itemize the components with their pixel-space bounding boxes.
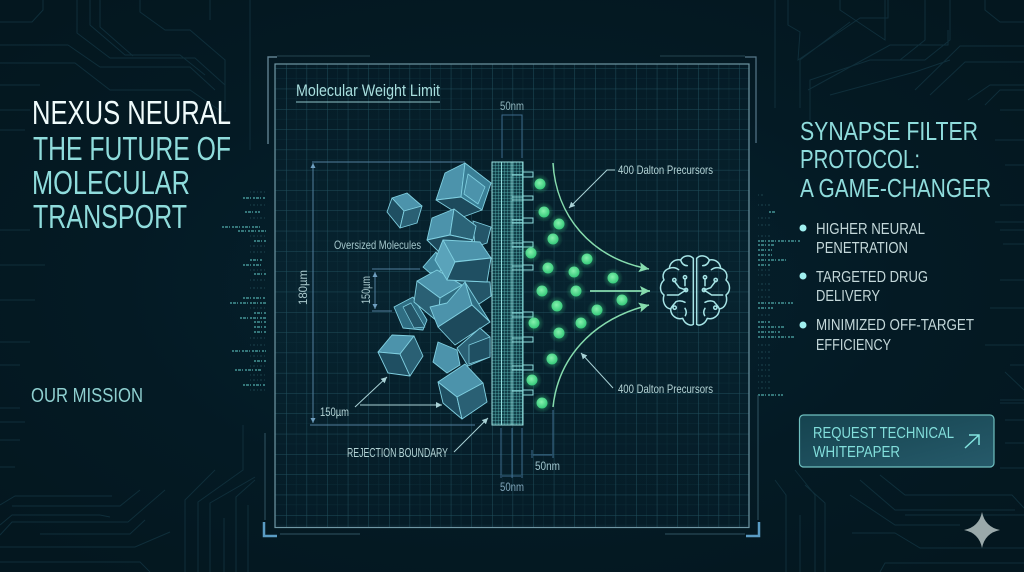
cube: large front (430, 282, 490, 345)
callout: rejection boundary: REJECTION BOUNDARY (347, 446, 448, 460)
icon: external arrow (965, 435, 979, 448)
dimension: bottom 50nm: 50nm (500, 480, 524, 494)
oversized molecule cubes (378, 163, 491, 419)
arrow: middle flow to brain (590, 290, 650, 292)
dimension: lower right 50nm (532, 410, 560, 473)
dimension: top 50nm: 50nm (500, 99, 524, 113)
dimension: bottom 50nm (500, 428, 524, 494)
benefit: higher neural penetration: HIGHER NEURAL (816, 221, 925, 238)
right data stream (758, 195, 800, 395)
callout: 150 micrometre (320, 377, 442, 419)
benefit: minimized off-target efficiency: MINIMIZED OFF-TARGET (816, 317, 974, 334)
button: request technical whitepaper: REQUEST TECHNICAL (813, 425, 954, 442)
callout: upper 400 dalton precursors (569, 163, 713, 208)
callout: 150 micrometre: 150µm (320, 405, 349, 419)
subtitle: The future of molecular transport: THE FUTURE OF (33, 130, 231, 167)
heading: molecular weight limit: Molecular Weight Limit (296, 82, 440, 100)
left data stream (222, 192, 266, 390)
cube: isolated lower (378, 335, 423, 376)
dimension: inner 150 micrometre (361, 269, 420, 311)
callout: rejection boundary (347, 418, 488, 460)
button: request technical whitepaper: WHITEPAPER (813, 444, 900, 461)
dimension: lower right 50nm: 50nm (535, 459, 560, 473)
benefit: minimized off-target efficiency: EFFICIENCY (816, 337, 891, 354)
label: oversized molecules: Oversized Molecules (334, 238, 421, 252)
icon: sparkle watermark (964, 512, 1000, 548)
subtitle: The future of molecular transport: MOLECULAR (32, 164, 190, 201)
callout: upper 400 dalton precursors: 400 Dalton Precursors (618, 163, 713, 177)
title: Nexus Neural: NEXUS NEURAL (32, 94, 231, 131)
cube: central (414, 270, 465, 322)
precursor particles (521, 174, 632, 413)
cube: bottom front (438, 364, 487, 419)
benefit: higher neural penetration: PENETRATION (816, 240, 908, 257)
button: request technical whitepaper (800, 415, 994, 467)
benefit: minimized off-target efficiency (800, 317, 974, 354)
dimension: top 50nm (500, 99, 524, 158)
cube: top with recess (436, 163, 491, 217)
benefit: higher neural penetration (800, 221, 925, 257)
cube: second (427, 209, 476, 258)
cube: lower pair (433, 328, 490, 373)
cube: dark behind centre (443, 280, 491, 310)
left title block (32, 94, 231, 235)
our mission label: OUR MISSION (31, 385, 143, 407)
cube: left small (394, 297, 427, 330)
benefits list (800, 221, 974, 354)
right heading: synapse filter protocol (800, 116, 991, 203)
membrane channels and teeth (502, 162, 533, 425)
callout: lower 400 dalton precursors (581, 353, 713, 396)
cube: isolated upper (387, 193, 422, 228)
mesh wall (492, 162, 523, 425)
particle glow (521, 174, 632, 413)
dimension: inner 150 micrometre: 150µm (361, 276, 373, 304)
subtitle: The future of molecular transport (32, 130, 231, 235)
callout: lower 400 dalton precursors: 400 Dalton Precursors (618, 382, 713, 396)
right heading: synapse filter protocol: PROTOCOL: (800, 144, 920, 174)
benefit: targeted drug delivery: TARGETED DRUG (816, 269, 928, 286)
right heading: synapse filter protocol: SYNAPSE FILTER (800, 116, 978, 146)
benefit: targeted drug delivery (800, 269, 928, 305)
benefit: targeted drug delivery: DELIVERY (816, 288, 880, 305)
dimension: 180 micrometre: 180µm (298, 270, 310, 305)
icon: brain (660, 256, 729, 325)
blueprint corner brackets (264, 56, 759, 536)
particle cores (526, 178, 628, 408)
blueprint grid frame (275, 64, 749, 528)
cube: mid large (435, 240, 491, 282)
subtitle: The future of molecular transport: TRANSPORT (33, 198, 187, 235)
dimension: 180 micrometre (298, 162, 475, 425)
arrow: lower flow to brain (553, 305, 649, 407)
cube: small behind (423, 252, 445, 273)
filter membrane (492, 162, 533, 425)
arrow: upper flow to brain (553, 163, 649, 269)
cube: rear right (473, 221, 491, 247)
